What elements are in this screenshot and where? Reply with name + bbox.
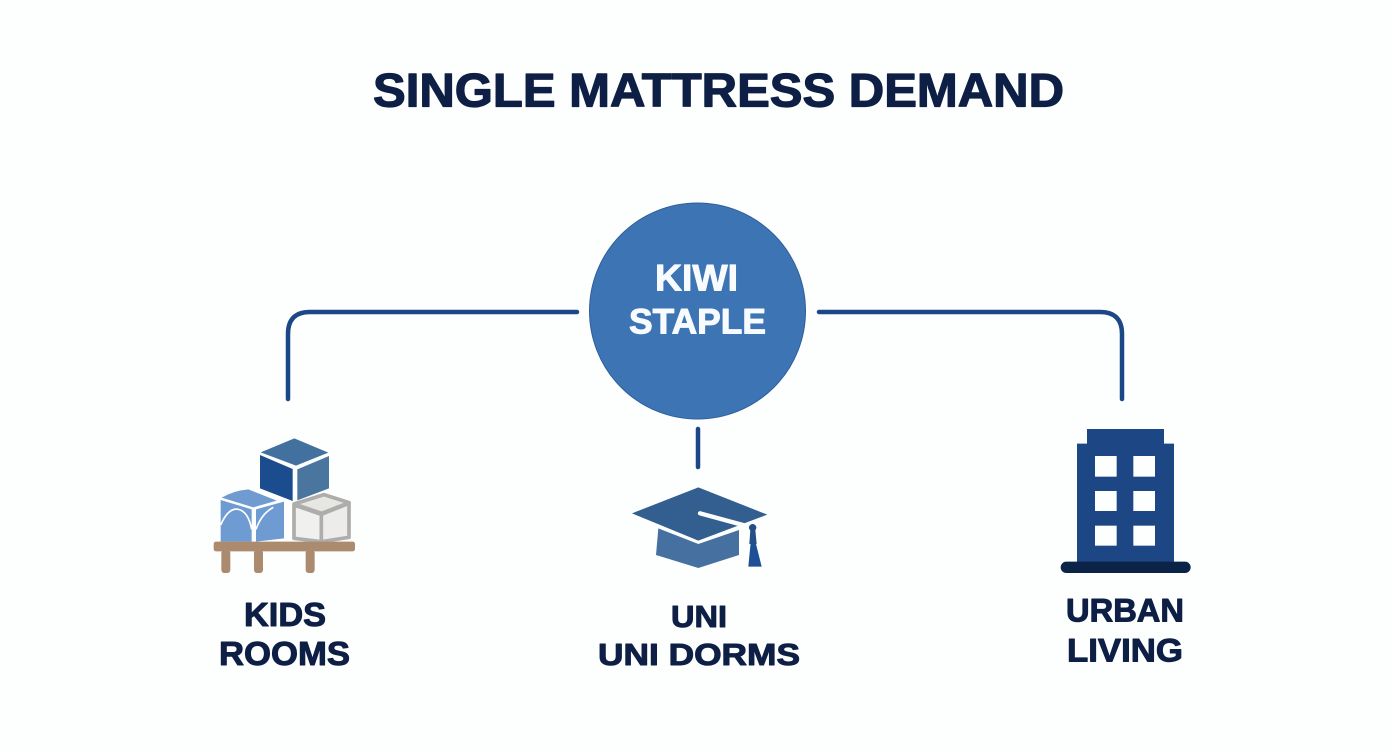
- label: urban living: URBAN: [1066, 592, 1184, 628]
- connector: hub to urban living: [819, 312, 1122, 399]
- label: urban living: LIVING: [1067, 632, 1183, 668]
- hub label: [629, 258, 766, 342]
- icon: toy blocks on shelf: [214, 438, 355, 573]
- title: SINGLE MATTRESS DEMAND: [373, 64, 1064, 116]
- label: kids rooms: ROOMS: [219, 635, 350, 672]
- hub label: STAPLE: [629, 302, 766, 342]
- connector: hub to kids rooms: [288, 312, 577, 399]
- connector: hub to uni dorms: [696, 429, 700, 467]
- label: kids rooms: [219, 596, 350, 672]
- icon: graduation cap: [632, 487, 767, 568]
- icon: apartment building: [1061, 429, 1191, 573]
- label: uni dorms: UNI DORMS: [598, 637, 800, 672]
- label: uni dorms: UNI: [671, 599, 727, 634]
- label: urban living: [1066, 592, 1184, 668]
- central hub: kiwi staple: [590, 203, 806, 419]
- label: kids rooms: KIDS: [244, 596, 326, 633]
- label: uni dorms: [598, 599, 800, 672]
- hub label: KIWI: [655, 258, 738, 298]
